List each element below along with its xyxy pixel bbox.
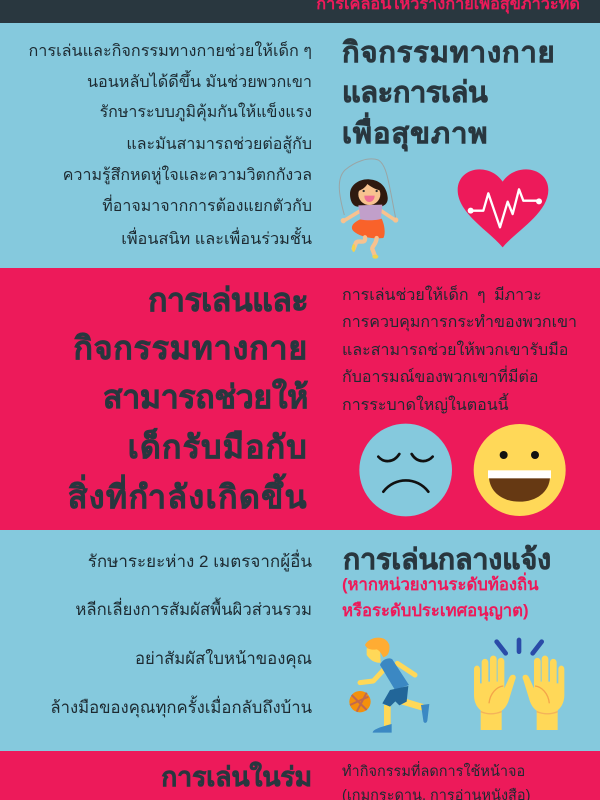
heading: play helps children cope: สิ่งที่กำลังเกิดขึ้น bbox=[68, 479, 308, 515]
body text: emotional control: และสามารถช่วยให้พวกเขารับมือ bbox=[342, 342, 568, 359]
note: if permitted: หรือระดับประเทศอนุญาต) bbox=[342, 601, 529, 620]
heading: indoor play: การเล่นในร่ม bbox=[161, 762, 312, 792]
body text: benefits of activity: เพื่อนสนิท และเพื่อนร่วมชั้น bbox=[121, 230, 312, 248]
heading: play helps children cope: กิจกรรมทางกาย bbox=[73, 330, 308, 366]
illustrations: faces bbox=[359, 424, 566, 516]
body text: emotional control bbox=[342, 285, 577, 414]
top header band bbox=[0, 0, 600, 23]
body text: reduce screen time bbox=[342, 761, 530, 800]
body text: benefits of activity: นอนหลับได้ดีขึ้น มันช่วยพวกเขา bbox=[87, 73, 312, 91]
heading: activity and play for health bbox=[342, 37, 556, 152]
body text: outdoor rules: อย่าสัมผัสใบหน้าของคุณ bbox=[135, 649, 312, 668]
body text: benefits of activity bbox=[28, 41, 312, 248]
body text: outdoor rules: ล้างมือของคุณทุกครั้งเมื่อกลับถึงบ้าน bbox=[50, 698, 312, 717]
body text: benefits of activity: ที่อาจมาจากการต้องแยกตัวกับ bbox=[102, 198, 312, 215]
icon: raised hands bbox=[474, 640, 564, 730]
icon: person dribbling basketball bbox=[349, 638, 429, 733]
heading: activity and play for health: เพื่อสุขภาพ bbox=[342, 118, 488, 150]
heading: activity and play for health: และการเล่น bbox=[342, 77, 487, 109]
heading: outdoor play: การเล่นกลางแจ้ง bbox=[343, 544, 551, 576]
icon: girl skipping rope bbox=[339, 159, 398, 259]
illustrations: player and hands bbox=[349, 638, 564, 733]
heading: play helps children cope: สามารถช่วยให้ bbox=[103, 379, 308, 415]
panel: indoor play bbox=[0, 751, 600, 800]
body text: reduce screen time: ทำกิจกรรมที่ลดการใช้หน้าจอ bbox=[342, 764, 525, 780]
heading: play helps children cope: เด็กรับมือกับ bbox=[128, 429, 308, 465]
body text: emotional control: การเล่นช่วยให้เด็ก ๆ มีภาวะ bbox=[342, 287, 542, 304]
body text: emotional control: กับอารมณ์ของพวกเขาที่มีต่อ bbox=[342, 369, 538, 386]
heading: activity and play for health: กิจกรรมทางกาย bbox=[342, 37, 556, 69]
body text: outdoor rules: รักษาระยะห่าง 2 เมตรจากผู้อื่น bbox=[88, 552, 312, 571]
body text: outdoor rules bbox=[50, 550, 312, 718]
heading: play helps children cope bbox=[68, 282, 308, 515]
body text: emotional control: การระบาดใหญ่ในตอนนี้ bbox=[342, 397, 509, 414]
icon: heart with pulse bbox=[458, 169, 548, 247]
body text: benefits of activity: ความรู้สึกหดหู่ใจและความวิตกกังวล bbox=[63, 167, 312, 184]
icon: laughing face bbox=[474, 424, 566, 516]
note: if permitted bbox=[342, 572, 539, 621]
body text: emotional control: การควบคุมการกระทำของพวกเขา bbox=[342, 314, 577, 331]
heading: play helps children cope: การเล่นและ bbox=[148, 282, 308, 318]
panel: coping with what is happening bbox=[0, 268, 600, 530]
panel: health activity bbox=[0, 23, 600, 268]
panel: outdoor play bbox=[0, 530, 600, 751]
illustrations: girl and heart bbox=[338, 158, 548, 259]
note: if permitted: (หากหน่วยงานระดับท้องถิ่น bbox=[342, 575, 539, 594]
body text: benefits of activity: การเล่นและกิจกรรมทางกายช่วยให้เด็ก ๆ bbox=[28, 42, 312, 60]
body text: benefits of activity: รักษาระบบภูมิคุ้มกันให้แข็งแรง bbox=[100, 104, 312, 121]
body text: outdoor rules: หลีกเลี่ยงการสัมผัสพื้นผิวส่วนรวม bbox=[75, 600, 312, 619]
icon: sad face bbox=[359, 424, 452, 516]
body text: benefits of activity: และมันสามารถช่วยต่อสู้กับ bbox=[126, 136, 312, 153]
